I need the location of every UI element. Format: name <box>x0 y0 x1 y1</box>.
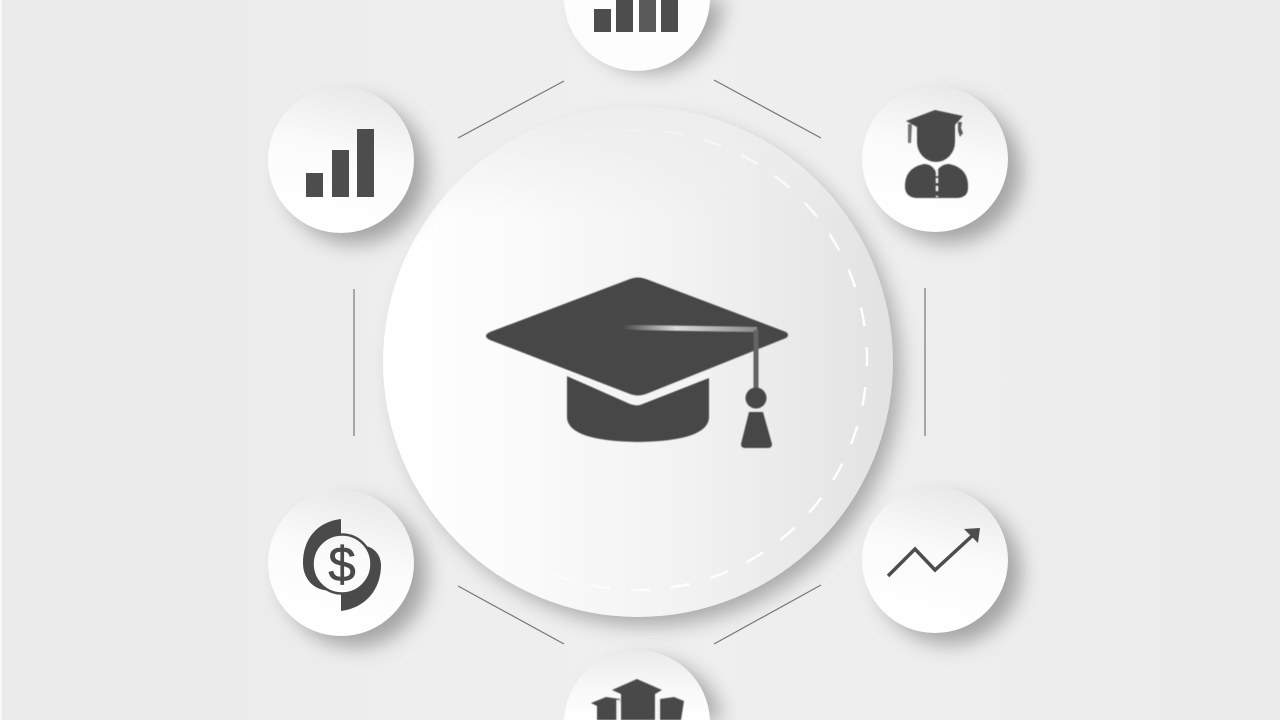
node: right-top graduate <box>862 86 1021 243</box>
icon: dollar cycle <box>303 519 381 611</box>
central disc <box>383 107 901 626</box>
icon: graduates group <box>591 679 684 720</box>
node: right-bottom trend <box>862 487 1021 644</box>
node: left-top bar chart <box>268 87 427 244</box>
node: left-bottom dollar <box>268 490 427 647</box>
icon: rising bars <box>306 129 374 197</box>
icon: graduation cap <box>486 278 788 448</box>
icon: graduate person <box>905 110 968 198</box>
node: top bar chart <box>564 0 723 72</box>
dashed ring <box>407 130 867 590</box>
connector lines <box>354 80 925 644</box>
icon: four bars <box>594 0 678 32</box>
icon: dollar cycle: $ <box>328 538 356 592</box>
icon: trend arrow <box>888 528 980 576</box>
node: bottom graduates <box>564 650 722 720</box>
